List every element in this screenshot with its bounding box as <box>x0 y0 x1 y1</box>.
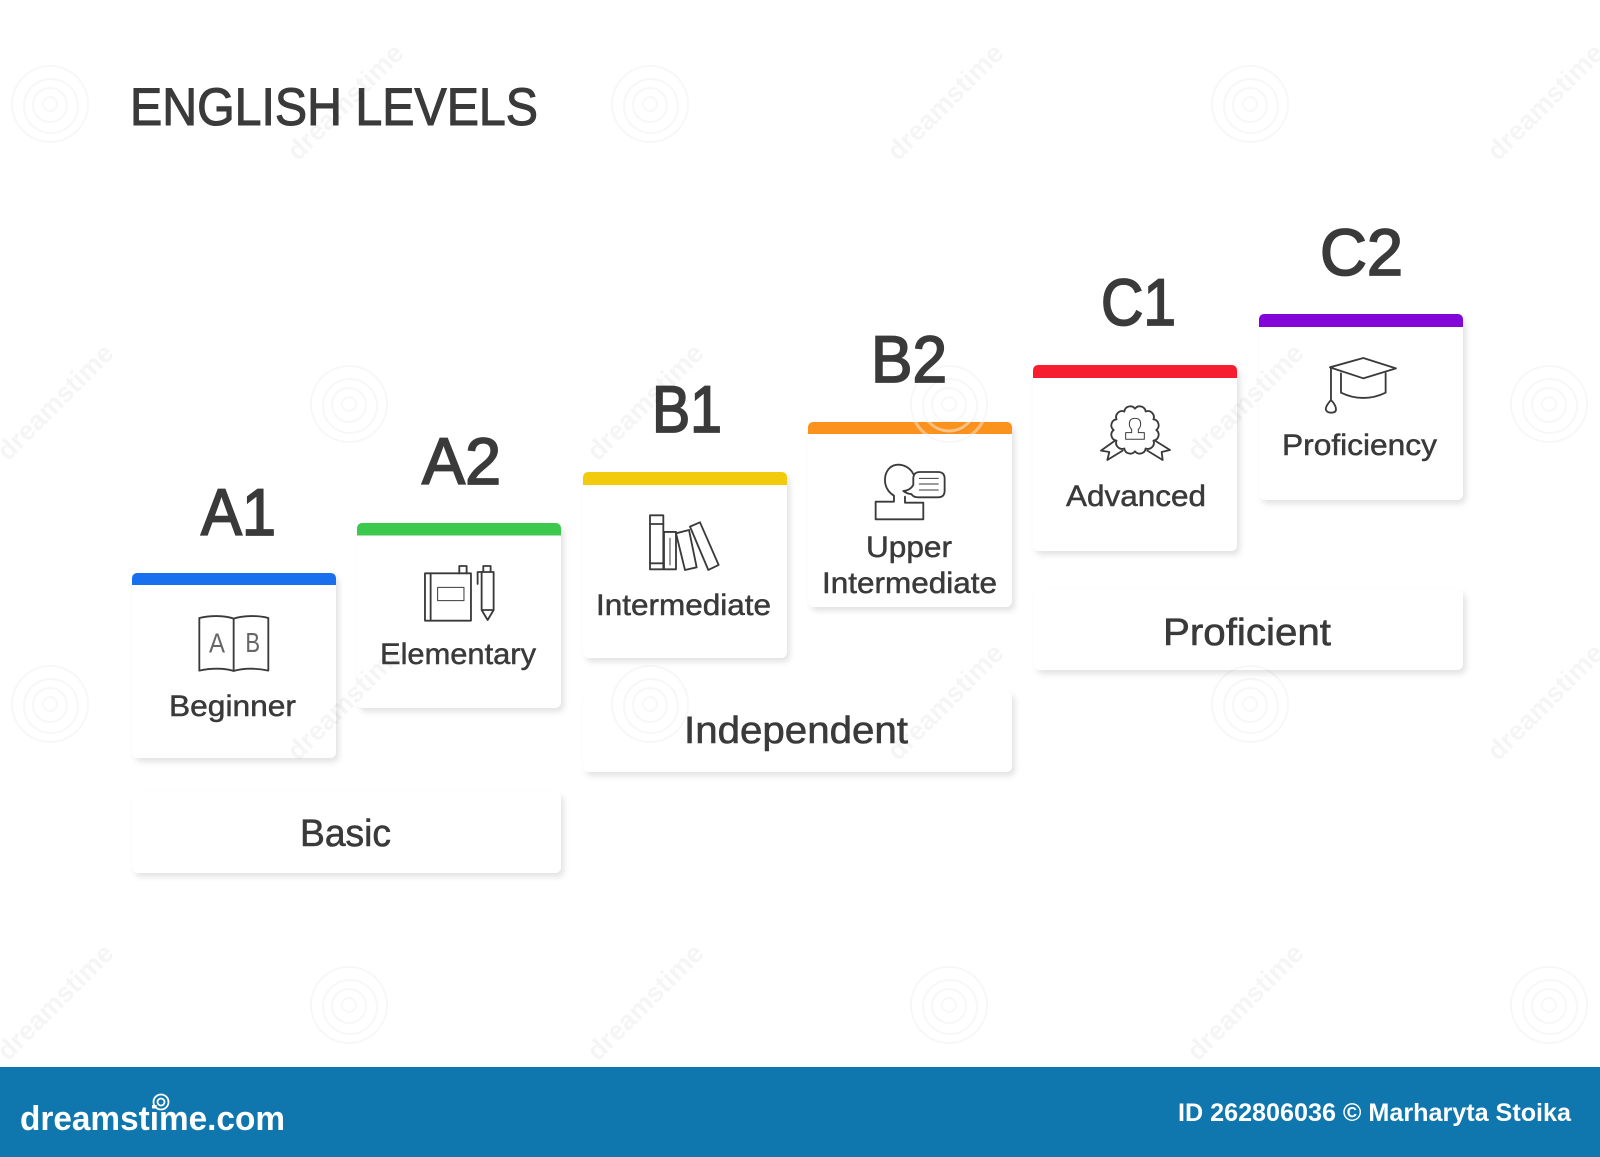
panel: Independent group <box>583 691 1012 772</box>
card B2 <box>808 422 1012 607</box>
icon: open book: B <box>245 627 260 658</box>
card A1 <box>132 573 336 758</box>
watermark layer: dreamstime <box>581 938 709 1066</box>
card C1 <box>1033 365 1237 551</box>
label: Elementary: Elementary <box>380 638 536 671</box>
title: ENGLISH LEVELS <box>130 78 538 137</box>
panel: A1 <box>132 475 336 758</box>
icon: open book: A <box>209 628 225 659</box>
watermark layer: dreamstime <box>881 638 1009 766</box>
colour bar: yellow <box>583 472 787 485</box>
label: Intermediate: Intermediate <box>596 589 771 622</box>
card C2 <box>1259 314 1463 500</box>
image id and credit: ID 262806036 © Marharyta Stoika <box>1178 1099 1572 1127</box>
colour bar: purple <box>1259 314 1463 327</box>
group box <box>132 792 561 873</box>
panel: B1 <box>583 372 787 658</box>
card B1 <box>583 472 787 658</box>
icon: notebook and pen <box>425 566 494 621</box>
level label B2: B2 <box>871 322 947 396</box>
colour bar: blue <box>132 573 336 585</box>
colour bar: orange <box>808 422 1012 434</box>
panel: Basic group <box>132 792 561 873</box>
label: Basic: Basic <box>300 813 391 855</box>
icon: logo spiral <box>154 1094 168 1110</box>
label: Independent: Independent <box>684 710 908 752</box>
panel: B2 <box>808 322 1012 607</box>
panel: A2 <box>357 424 561 708</box>
level label B1: B1 <box>652 372 722 446</box>
colour bar: red <box>1033 365 1237 378</box>
watermark layer: dreamstime <box>281 638 409 766</box>
label: Proficiency: Proficiency <box>1282 429 1437 462</box>
label: Upper Intermediate: Intermediate <box>822 567 997 600</box>
label: Upper Intermediate: Upper <box>866 531 952 564</box>
label: Advanced: Advanced <box>1066 480 1206 513</box>
level label A1: A1 <box>201 475 276 549</box>
label: Proficient: Proficient <box>1163 612 1331 654</box>
group box <box>583 691 1012 772</box>
watermark layer: dreamstime <box>1181 338 1309 466</box>
logo text: dreamstime.com <box>20 1100 285 1138</box>
watermark arcs on orange bar <box>914 422 984 434</box>
colour bar: green <box>357 523 561 536</box>
label: Beginner: Beginner <box>169 690 296 723</box>
icon: open book <box>199 616 268 671</box>
card A2 <box>357 523 561 708</box>
watermark layer: dreamstime <box>881 38 1009 166</box>
group box <box>1034 589 1463 670</box>
panel: Proficient group <box>1034 589 1463 670</box>
panel: C2 <box>1259 215 1463 500</box>
panel: C1 <box>1033 265 1237 551</box>
watermark layer: dreamstime <box>281 38 409 166</box>
icon: books <box>650 515 719 570</box>
label: Upper Intermediate <box>822 531 997 600</box>
footer bar <box>0 1067 1600 1157</box>
watermark layer: dreamstime <box>581 338 709 466</box>
icon: graduation cap <box>1326 358 1396 413</box>
level label A2: A2 <box>422 424 501 498</box>
icon: award rosette <box>1101 406 1170 460</box>
level label C2: C2 <box>1320 215 1403 289</box>
watermark layer: dreamstime <box>1181 938 1309 1066</box>
icon: speaking person <box>876 465 945 519</box>
level label C1: C1 <box>1101 265 1176 339</box>
